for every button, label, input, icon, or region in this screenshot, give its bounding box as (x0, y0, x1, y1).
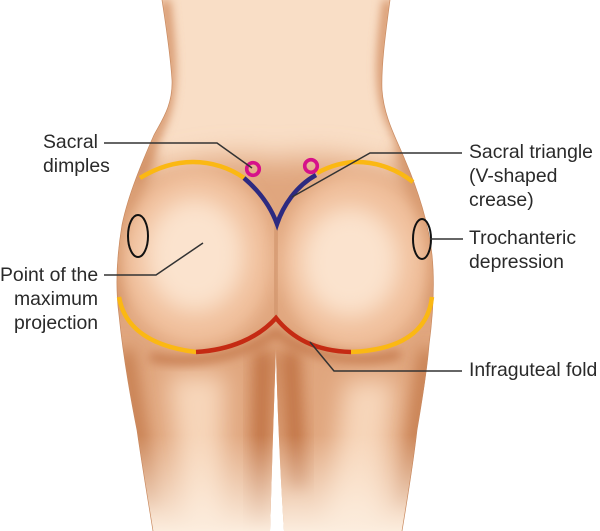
label: sacral dimples: dimples (43, 155, 110, 177)
body silhouette (116, 0, 434, 531)
leader: infragluteal fold (310, 342, 462, 371)
torso spine shading (270, 25, 282, 135)
label: sacral triangle: (V-shaped (469, 165, 557, 187)
sacral dimple left (247, 163, 259, 175)
infragluteal fold yellow right (351, 297, 432, 352)
hip base tone (117, 140, 433, 424)
thigh lower fade (140, 441, 415, 531)
leader: trochanteric (430, 238, 463, 240)
upper contour left (140, 162, 244, 178)
label: point of maximum projection: projection (14, 312, 98, 334)
label: point of maximum projection: maximum (14, 288, 98, 310)
thigh outer shading (125, 350, 428, 510)
central crease (275, 224, 277, 320)
label: trochanteric depression: depression (469, 251, 564, 273)
label: sacral triangle: Sacral triangle (469, 141, 593, 163)
leader: sacral triangle (292, 153, 462, 197)
trochanteric depression left (128, 215, 148, 257)
leader: sacral dimples (104, 143, 252, 168)
leader: point of maximum projection (104, 243, 203, 275)
left buttock mass (121, 170, 273, 346)
label: sacral dimples: Sacral (43, 131, 98, 153)
right buttock highlight (300, 206, 400, 318)
left buttock highlight (145, 197, 245, 313)
label: infragluteal fold: Infraguteal fold (469, 359, 597, 381)
infragluteal fold yellow left (119, 297, 196, 352)
trochanteric depression right (413, 219, 431, 259)
thigh inner shading (259, 350, 298, 531)
sacral triangle crease (V shape) (244, 175, 316, 224)
sacral dimple right (305, 160, 317, 172)
label: point of maximum projection: Point of the (0, 264, 98, 286)
thigh base tone (135, 349, 418, 530)
infragluteal fold red (196, 318, 351, 352)
label: sacral triangle: crease) (469, 189, 534, 211)
shadow under folds (150, 332, 400, 360)
upper contour right (317, 162, 413, 182)
hip outer shading (118, 150, 432, 310)
body edge line (117, 0, 433, 531)
torso edge shading (135, 0, 418, 185)
label: trochanteric depression: Trochanteric (469, 227, 576, 249)
right buttock mass (281, 174, 429, 350)
thigh highlights (168, 375, 395, 531)
